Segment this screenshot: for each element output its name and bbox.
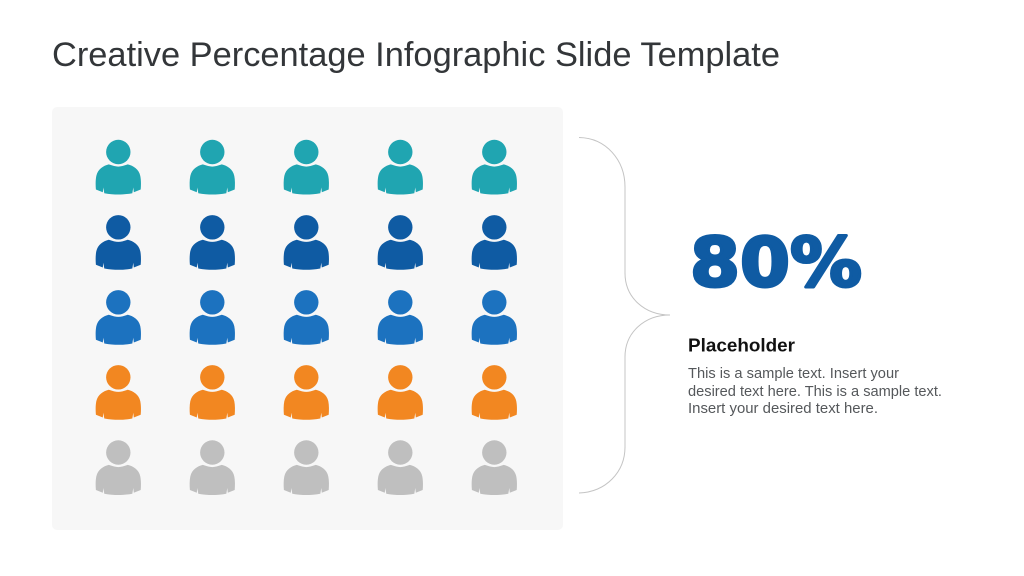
- curly brace: [579, 138, 670, 493]
- panel: people grid: [52, 107, 563, 530]
- body text: [688, 366, 942, 417]
- percentage value: 80%: [690, 224, 862, 303]
- subheading: Placeholder: [688, 334, 795, 356]
- row 1: teal people: [96, 140, 517, 194]
- row 3: blue people: [96, 290, 517, 345]
- body text: desired text here. This is a sample text.: [688, 384, 942, 400]
- body text: This is a sample text. Insert your: [688, 366, 899, 382]
- title: Creative Percentage Infographic Slide Template: [52, 36, 780, 74]
- row 2: dark blue people: [96, 215, 517, 270]
- row 4: orange people: [96, 365, 517, 420]
- body text: Insert your desired text here.: [688, 401, 878, 417]
- row 5: grey people: [96, 440, 517, 495]
